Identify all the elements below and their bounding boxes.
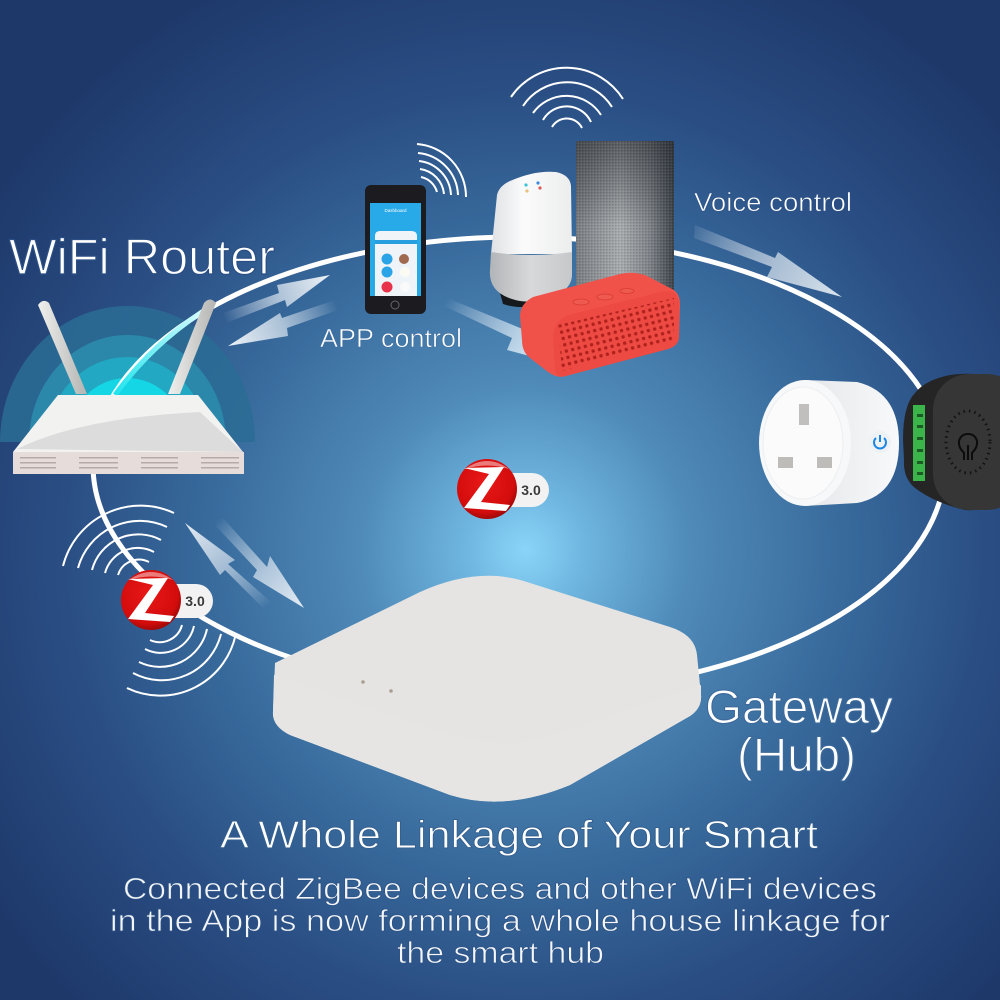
speaker dots ring: [946, 411, 990, 473]
plug sockets: [799, 404, 809, 425]
module body: [903, 374, 1000, 510]
arrow: voice control to devices: [694, 225, 842, 297]
Z mark: [464, 467, 510, 511]
voice signal waves: [511, 68, 623, 128]
arrow: router to phone: [223, 275, 330, 323]
ZigBee badge center: [457, 459, 549, 519]
red speaker body: [520, 273, 680, 377]
description text: [110, 872, 890, 970]
right antenna: [168, 300, 216, 394]
white smart speaker: [490, 172, 572, 307]
version label: 3.0: [521, 482, 541, 498]
upper waves near ZigBee badge: [63, 506, 174, 575]
label: APP control: APP control: [320, 323, 462, 353]
ring segment inside router glow: [115, 305, 213, 395]
ZigBee badge left: [121, 570, 213, 630]
gloss: [465, 461, 509, 469]
black smart switch module: [903, 374, 1000, 510]
label: Gateway (Hub): (Hub): [737, 728, 856, 781]
module face: [933, 374, 1000, 510]
description text: Connected ZigBee devices and other WiFi devices: [123, 872, 877, 906]
speaker lights: [524, 183, 528, 187]
speaker buttons: [573, 288, 634, 305]
plug body: [805, 380, 899, 506]
speaker lower fabric: [490, 252, 572, 301]
hub body: [273, 576, 701, 802]
phone app panel: [375, 231, 417, 296]
phone home button: [391, 301, 399, 309]
router signal arcs: [0, 306, 255, 442]
pill: [487, 473, 549, 507]
phone screen: [370, 203, 421, 296]
router front: [13, 452, 244, 474]
pill: [151, 584, 213, 618]
hub LEDs: [361, 680, 365, 684]
red Z ball: [457, 459, 517, 519]
label: Voice control: Voice control: [694, 187, 852, 217]
red Z ball: [121, 570, 181, 630]
description text: the smart hub: [397, 936, 604, 970]
green terminal: [913, 405, 925, 481]
phone dashboard title: Dashboard: [384, 208, 407, 213]
fabric speaker: [576, 141, 674, 311]
speaker grille: [558, 298, 674, 371]
Z mark: [128, 578, 174, 622]
red speaker front face: [553, 291, 679, 376]
description text: in the App is now forming a whole house linkage for: [110, 904, 890, 938]
phone: [365, 185, 426, 314]
arrow: phone to router: [228, 300, 338, 346]
red speaker: [520, 273, 680, 377]
bulb icon: [959, 434, 977, 460]
phone signal waves: [417, 144, 466, 197]
arrow: gateway to router: [185, 523, 272, 608]
hub front edge shading: [273, 675, 701, 802]
arrow: router to gateway: [214, 517, 304, 608]
phone body: [365, 185, 426, 314]
headline: A Whole Linkage of Your Smart: [220, 814, 818, 857]
lower waves near ZigBee badge: [127, 625, 236, 696]
gateway hub: [273, 576, 701, 802]
speaker upper shell: [491, 172, 572, 254]
plug face: [759, 380, 851, 506]
smart plug: [759, 380, 899, 506]
heading: WiFi Router: WiFi Router: [9, 229, 275, 285]
arrow: phone to speakers: [444, 298, 537, 358]
label: Gateway (Hub): Gateway: [705, 680, 893, 733]
gloss: [129, 572, 173, 580]
left antenna: [38, 301, 87, 394]
connection ring: [93, 237, 945, 693]
version label: 3.0: [185, 593, 205, 609]
router vents: [20, 457, 239, 468]
label: Gateway (Hub): [705, 680, 893, 781]
router body top: [13, 395, 243, 452]
power button: [869, 431, 891, 453]
router: [13, 300, 244, 474]
